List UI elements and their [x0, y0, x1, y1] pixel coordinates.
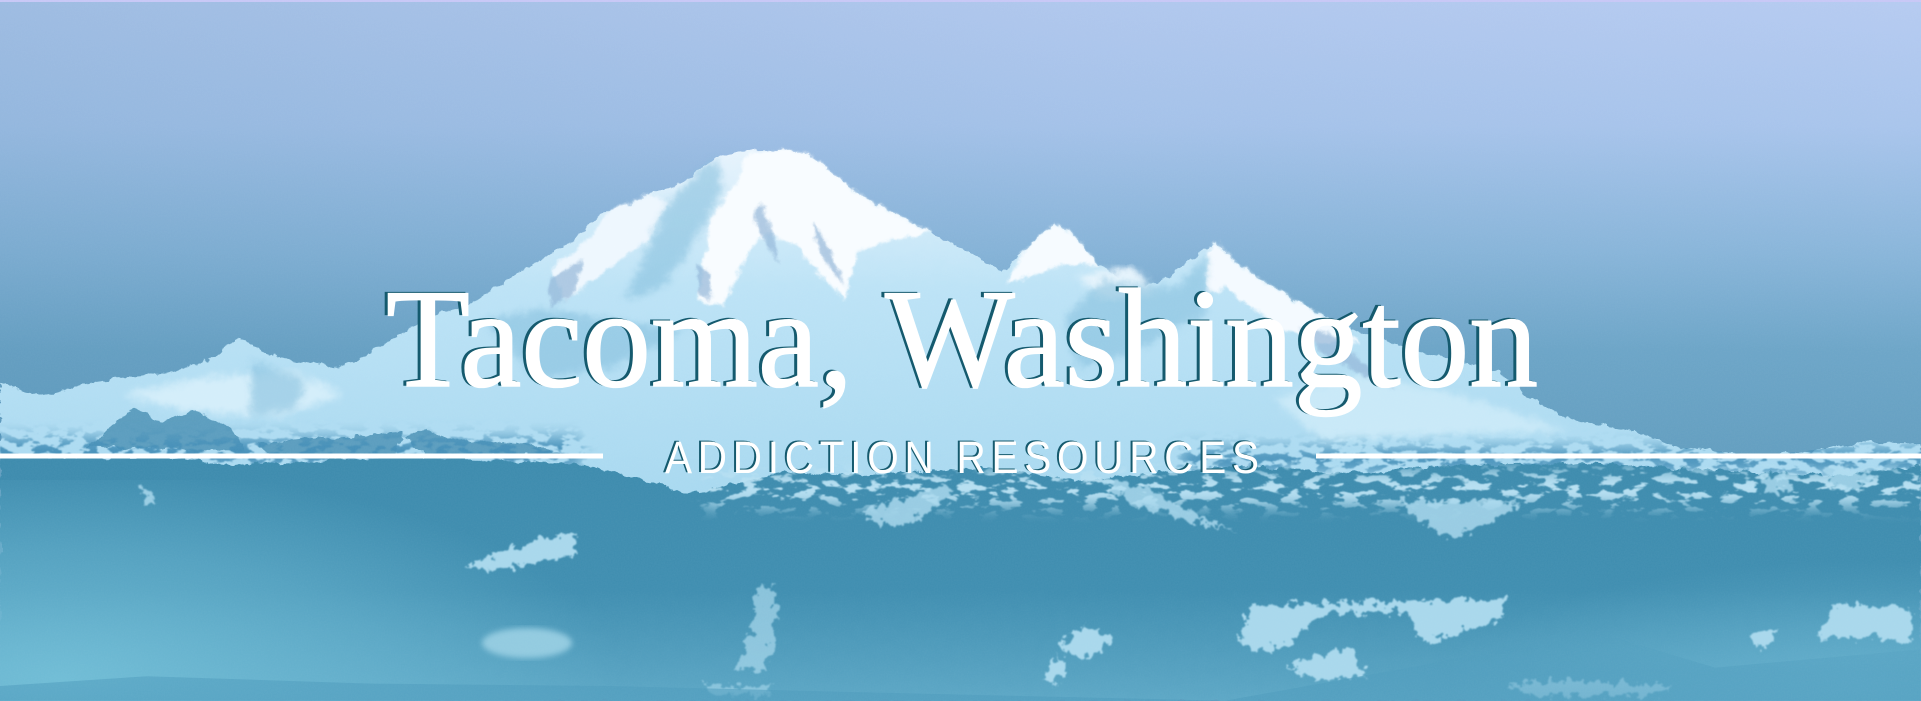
white shoulder: [1078, 267, 1158, 300]
bright summit face: [698, 148, 931, 306]
snow streaks below the main ridge: [141, 466, 1911, 696]
snow covered range: [0, 148, 1921, 494]
snow patches on lower hills: [463, 533, 1911, 696]
subtitle: ADDICTION RESOURCES: [665, 433, 1259, 484]
snow speckle below the ridge: [700, 460, 1921, 517]
rock shading on summit: [549, 202, 1396, 390]
soft snowy mound: [482, 628, 572, 658]
white secondary peak: [1007, 223, 1099, 284]
rocky speckle on lower slopes: [0, 427, 1921, 476]
shadowed slopes: [251, 157, 1207, 417]
divider line left: [0, 454, 603, 458]
title: Tacoma, Washington: [386, 261, 1538, 417]
divider line right: [1316, 454, 1921, 458]
distant dark ridge: [0, 631, 1921, 701]
white ridge left: [551, 196, 668, 300]
foothill haze bottom left: [0, 480, 700, 701]
rocky lower left range: [86, 407, 564, 456]
foothill haze bottom right: [1400, 560, 1921, 701]
white third peak: [1207, 241, 1360, 343]
mountain range illustration: [0, 148, 1921, 701]
title: Tacoma, Washington: [383, 260, 1535, 416]
subtitle: ADDICTION RESOURCES: [663, 432, 1257, 483]
dark forested foothills: [0, 456, 1921, 701]
